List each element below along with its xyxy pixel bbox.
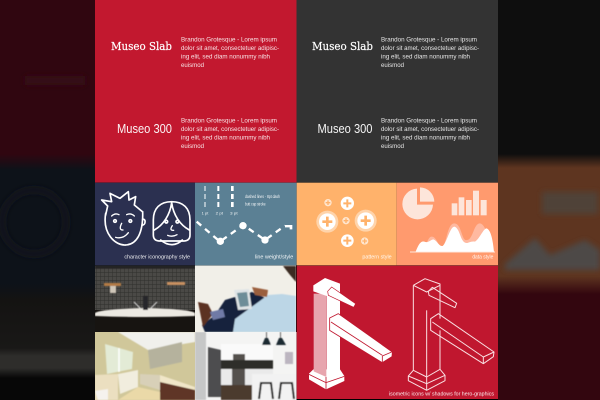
panel: pattern style — [297, 183, 397, 265]
body text: Brandon Grotesque 1 on red: ing elit, sed diam nonummy nibh — [181, 54, 270, 60]
body text: Brandon Grotesque 1 on dark: euismod — [381, 62, 404, 69]
body text: Brandon Grotesque 1 on dark: Brandon Grotesque - Lorem ipsum — [381, 36, 477, 44]
caption: isometric icons: isometric icons w/ shadows for hero-graphics — [389, 391, 494, 397]
body text: Brandon Grotesque 2 on dark: dolor sit amet, consectetuer adipisc- — [381, 126, 479, 133]
body text: Brandon Grotesque 2 on dark: euismod — [381, 143, 404, 150]
panel: isometric faucets — [297, 266, 498, 399]
panel: data style — [397, 183, 498, 265]
body text: Brandon Grotesque 2 on red: ing elit, sed diam nonummy nibh — [181, 134, 270, 142]
heading: Museo Slab on red: Museo Slab — [111, 39, 172, 53]
body text: Brandon Grotesque 1 on red: euismod — [181, 62, 204, 69]
heading: Museo Slab on dark: Museo Slab — [312, 39, 373, 53]
body text: Brandon Grotesque 1 on red: dolor sit amet, consectetuer adipisc- — [181, 45, 279, 52]
body text: Brandon Grotesque 2 on red: euismod — [181, 143, 204, 150]
body text: Brandon Grotesque 1 on red: Brandon Grotesque - Lorem ipsum — [181, 36, 277, 44]
caption: line weight style: line weight/style — [255, 255, 293, 261]
body text: Brandon Grotesque 2 on red: dolor sit amet, consectetuer adipisc- — [181, 126, 279, 133]
heading: Museo 300 on red: Museo 300 — [117, 122, 172, 136]
chart: pie — [402, 187, 434, 219]
photo: person with tablet — [195, 266, 296, 332]
body text: Brandon Grotesque 2 on dark: Brandon Grotesque - Lorem ipsum — [381, 118, 477, 124]
icon: boy face — [102, 192, 145, 245]
body text: Brandon Grotesque 2 on red: Brandon Grotesque - Lorem ipsum — [181, 118, 277, 124]
note: dashed lines: butt cap stroke — [245, 201, 266, 206]
photo: bathroom with dark tile — [95, 266, 195, 332]
icon: girl face — [153, 202, 190, 245]
caption: character iconography style: character iconography style — [124, 255, 190, 261]
caption: data style: data style — [472, 255, 493, 261]
body text: Brandon Grotesque 2 on dark: ing elit, sed diam nonummy nibh — [381, 134, 470, 142]
photo: bright bathroom — [95, 332, 195, 400]
chart: area — [410, 223, 495, 252]
body text: Brandon Grotesque 1 on dark: ing elit, sed diam nonummy nibh — [381, 54, 470, 60]
panel: line weight style — [195, 183, 297, 265]
photo: white kitchen — [195, 332, 296, 400]
note: dashed lines: dashed lines - 8pt dash — [245, 194, 280, 199]
labels: point sizes — [202, 211, 239, 216]
line weight samples — [205, 186, 232, 208]
icon pattern: plus circles — [316, 197, 377, 247]
blurred background: right side — [498, 0, 600, 400]
labels: point sizes: 2 pt — [216, 211, 224, 216]
panel: character iconography style — [95, 183, 195, 265]
chart: dashed line with nodes — [197, 222, 292, 245]
caption: pattern style: pattern style — [362, 255, 392, 261]
labels: point sizes: 1 pt — [202, 211, 209, 216]
body text: Brandon Grotesque 1 on dark: dolor sit amet, consectetuer adipisc- — [381, 45, 479, 52]
chart: bars — [452, 191, 487, 215]
icon: outline faucet — [408, 279, 494, 390]
panel: red type specimen — [95, 0, 296, 182]
panel: dark type specimen — [296, 0, 498, 182]
heading: Museo 300 on dark: Museo 300 — [318, 122, 373, 136]
icon: solid faucet with shadow — [309, 278, 392, 389]
labels: point sizes: 3 pt — [230, 211, 239, 216]
blurred background: left side — [0, 0, 95, 400]
